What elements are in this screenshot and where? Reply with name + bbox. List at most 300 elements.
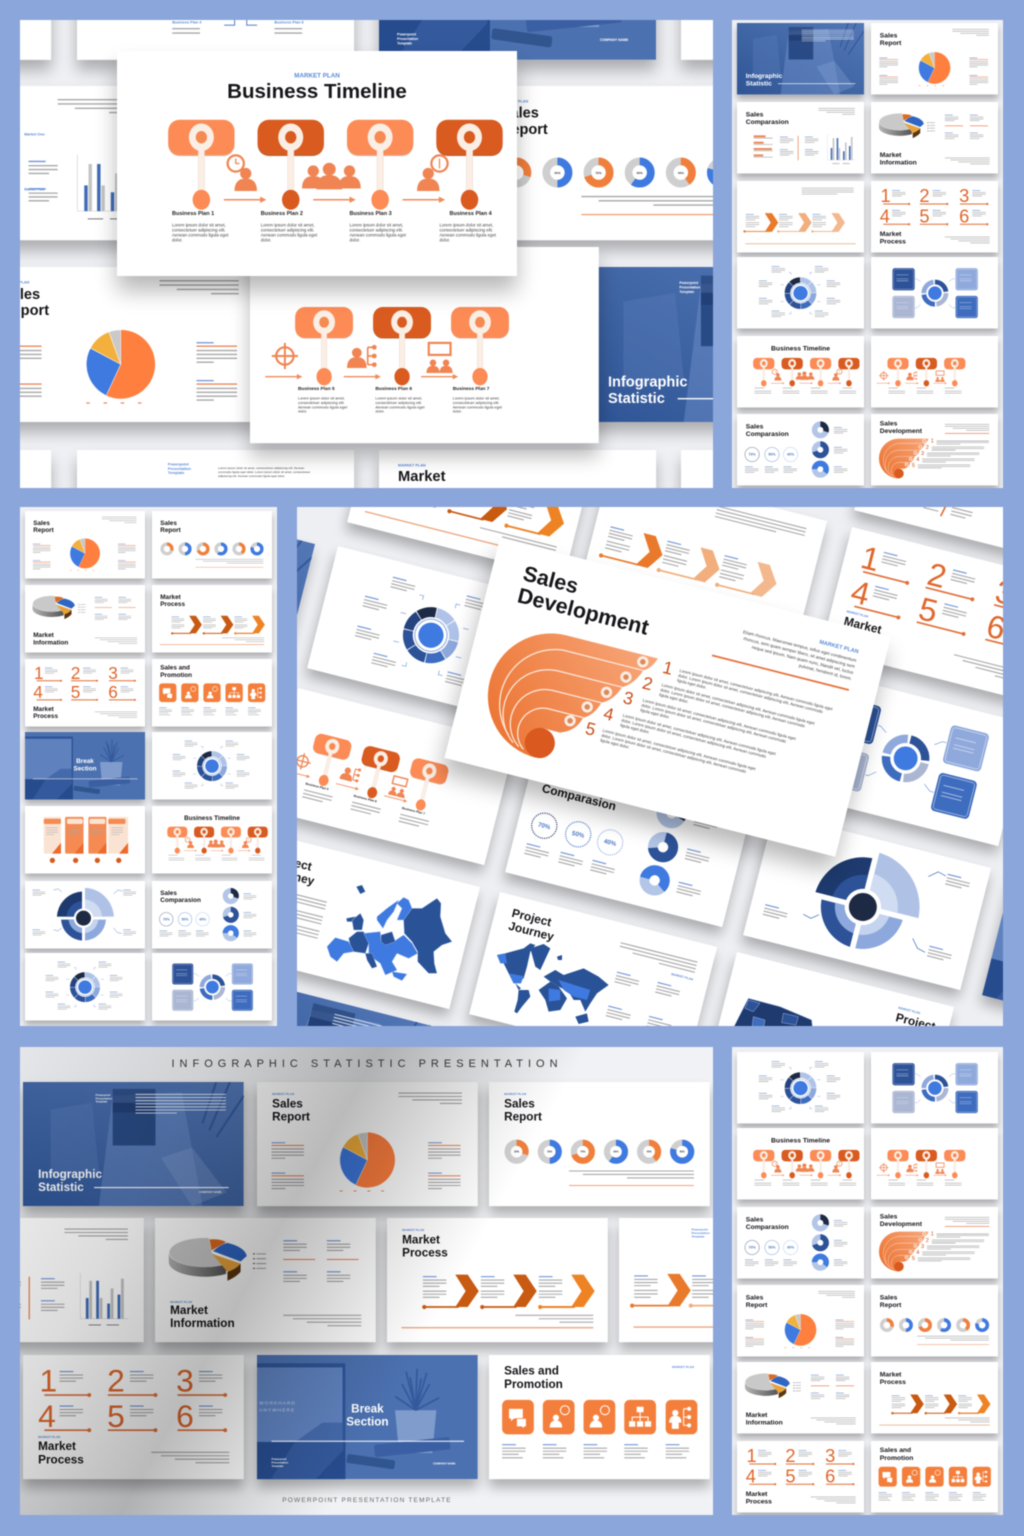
thumb: sales and promotion: Sales and xyxy=(160,665,190,672)
thumb: market information: Market xyxy=(33,632,55,639)
slide: wheel diagram xyxy=(305,546,555,731)
slide: project journey: MARKET PLAN xyxy=(671,972,694,982)
slide: market process numbers: Market xyxy=(842,614,883,637)
slide: bottom row market xyxy=(370,450,664,488)
thumb: market process numbers xyxy=(737,1441,864,1517)
thumb: sales comparison circles: Comparasion xyxy=(746,1224,789,1231)
text: numbered items: dolor. Lorem ipsum dolor sit amet, consectetuer adipiscing elit. Aenean commodo xyxy=(641,702,787,744)
thumb: chevrons xyxy=(737,181,864,257)
slide: sales report donuts: 70% xyxy=(595,171,602,175)
thumb: sales development: 4 xyxy=(916,1250,919,1256)
heading: sales development: Sales xyxy=(521,562,581,599)
text: plan labels: consectetuer adipiscing elit. xyxy=(375,401,422,405)
thumb: business timeline: Business Timeline xyxy=(771,346,830,353)
slide: bottom row market: MARKET PLAN xyxy=(398,463,426,467)
text: numbered items: ligula eget dolor. xyxy=(600,737,630,750)
slide: sales report donuts: Sales xyxy=(501,106,539,122)
thumb: sales development: 3 xyxy=(921,1244,924,1250)
slide: market information: Information xyxy=(170,1317,235,1330)
text: plan labels xyxy=(172,211,497,243)
slide: usa: MARKET PLAN xyxy=(898,1006,921,1015)
slide: market process numbers: 6 xyxy=(983,608,1009,647)
slide: europe xyxy=(230,832,480,1017)
slide: chevrons continued xyxy=(619,1218,840,1350)
thumb: wheel diagram xyxy=(737,1052,864,1128)
slide: break section: Break xyxy=(351,1402,384,1415)
slide: infographic statistic: Infographic xyxy=(38,1168,102,1181)
slide: market process chevrons xyxy=(345,400,595,585)
slide: project journey: Journey xyxy=(507,919,556,944)
slide: infographic statistic xyxy=(23,1082,244,1214)
panel: rotated sales development showcase xyxy=(65,388,1024,1159)
thumb: market process numbers: Market xyxy=(746,1491,768,1498)
slide: sales comparison: 50% xyxy=(571,830,585,840)
text: plan labels: Lorem ipsum dolor sit amet, xyxy=(298,397,345,401)
slide: blue cover left xyxy=(65,489,315,674)
thumb: market process numbers: 1 xyxy=(881,185,891,206)
thumb: sales comparison circles: 40% xyxy=(787,453,795,457)
slide: break section: Section xyxy=(346,1415,389,1428)
thumb: market information xyxy=(737,1362,864,1438)
slide: infographic statistic: Powerpoint xyxy=(95,1093,111,1097)
slide: sales report donuts xyxy=(489,1082,710,1214)
text: plan labels: Lorem ipsum dolor sit amet, xyxy=(375,397,422,401)
heading: sales development xyxy=(515,562,657,640)
thumb: sales development: 2 xyxy=(926,1238,929,1244)
slide: break section: Presentation xyxy=(271,1460,288,1464)
slide: bottom row powerpoint template: Lorem ipsum dolor sit amet, consectetuer adipiscing elit. Aenean xyxy=(218,466,305,470)
slide: market process numbers: 2 xyxy=(924,556,950,595)
slide: sales and promotion: Promotion xyxy=(504,1378,563,1391)
slide: sales report pie: MARKET PLAN xyxy=(2,280,30,284)
thumb: market information xyxy=(25,585,145,657)
text: plan labels: Lorem ipsum dolor sit amet, xyxy=(440,223,493,228)
text: market plan and intro: rhoncus, sem quam semper libero, sit amet adipiscing sem xyxy=(743,636,856,669)
slide: blue cover right xyxy=(980,873,1024,1058)
slide: hub diagram xyxy=(779,669,1024,854)
text: plan labels: Business Plan 4 xyxy=(450,211,493,217)
thumb: market process numbers: 5 xyxy=(785,1465,796,1486)
thumb: sales comparison bars: Comparasion xyxy=(746,119,789,126)
thumb: sales report pie xyxy=(25,511,145,583)
text: numbered items: dolor. Lorem ipsum dolor sit amet, consectetuer adipiscing elit. Aenean commodo xyxy=(601,733,747,774)
thumb: market process numbers: 1 xyxy=(747,1445,757,1466)
slide: market process chevrons: MARKET PLAN xyxy=(402,1228,424,1232)
slide: sales report donuts: 60% xyxy=(637,171,643,175)
text: market plan and intro: pulvinar, hendrerit id, lorem. xyxy=(798,663,852,681)
thumb: sales and promotion: Promotion xyxy=(160,672,192,679)
text: numbered items: 2 xyxy=(640,673,655,694)
thumb: business timeline xyxy=(152,806,272,878)
map: world xyxy=(497,943,609,1024)
slide: top row business plans xyxy=(68,20,362,79)
heading: market plan: MARKET PLAN xyxy=(294,72,340,79)
slide: europe: Journey xyxy=(268,863,316,888)
slide: top row break section: Powerpoint xyxy=(397,33,417,37)
slide: market process numbers: 4 xyxy=(38,1398,56,1434)
panel: thumbnails top right xyxy=(732,20,1003,490)
thumb: market process numbers: 6 xyxy=(108,682,118,702)
text: numbered items: ligula eget dolor. xyxy=(659,692,689,704)
slide: chevrons continued: Powerpoint xyxy=(691,1227,708,1231)
thumb: hub diagram xyxy=(871,257,998,333)
thumb: market information: Information xyxy=(33,639,68,646)
text: plan labels: dolor. xyxy=(440,238,450,243)
text: plan labels: dolor. xyxy=(261,238,271,243)
thumb: hub diagram xyxy=(152,953,272,1025)
text: plan labels: Aenean commodo ligula eget xyxy=(453,405,503,409)
heading: business timeline: Business Timeline xyxy=(227,80,407,103)
thumb: wheel diagram xyxy=(25,953,145,1025)
thumb: wheel diagram xyxy=(152,732,272,804)
slide: market process numbers: 5 xyxy=(915,590,941,630)
slide: sales comparison bars xyxy=(20,86,118,259)
text: numbered items: dolor. Lorem ipsum dolor sit amet, consectetuer adipiscing elit. Aenean commodo xyxy=(660,687,806,729)
text: plan labels: consectetuer adipiscing elit. xyxy=(261,228,314,233)
slide: top row break section: Presentation xyxy=(397,37,418,41)
metallic sheen overlay xyxy=(20,1047,713,1515)
thumb: business timeline xyxy=(737,336,864,412)
thumb: sales report pie: Report xyxy=(880,40,902,47)
slide: sales report pie xyxy=(0,267,259,432)
text: numbered items: Lorem ipsum dolor sit amet, consectetuer adipiscing elit. Aenean commodo ligula eget xyxy=(661,682,816,726)
text: numbered items: dolor. Lorem ipsum dolor sit amet, consectetuer adipiscing elit. Aenean commodo xyxy=(678,673,824,714)
thumb: business plans three xyxy=(871,336,998,412)
thumb: market process chevrons: Process xyxy=(880,1379,906,1386)
thumb: break section: Break xyxy=(76,758,94,765)
thumb: sales comparison circles: Comparasion xyxy=(160,897,201,904)
slide: market process numbers: MARKET PLAN xyxy=(846,609,870,619)
slide: bottom row powerpoint template xyxy=(68,450,362,488)
text: plan labels: consectetuer adipiscing elit. xyxy=(172,228,226,233)
slide: sales report donuts: 40% xyxy=(678,171,684,175)
thumb: market process numbers xyxy=(25,659,145,731)
thumb: sales report pie: Sales xyxy=(33,520,50,527)
slide: upper right xyxy=(852,388,1024,573)
text: plan labels: Lorem ipsum dolor sit amet, xyxy=(261,223,315,228)
map: usa xyxy=(734,998,813,1030)
text: market plan and intro: MARKET PLAN xyxy=(819,640,859,655)
slide: infographic statistic: Template xyxy=(95,1100,108,1104)
slide: business plans three: Business Plan 5 xyxy=(305,782,329,791)
slide: sales comparison xyxy=(503,750,753,935)
thumb: sales comparison circles xyxy=(152,881,272,953)
slide: sales report donuts: 40% xyxy=(647,1151,652,1154)
thumb: orange cards xyxy=(25,806,145,878)
slide: bar chart xyxy=(0,1218,144,1350)
slide: break section: Powerpoint xyxy=(271,1457,287,1461)
thumb: market process numbers: Market xyxy=(880,231,902,238)
slide: break section: ANYWHERE xyxy=(259,1408,295,1414)
thumb: sales development: Sales xyxy=(880,1214,898,1221)
text: plan labels: Aenean commodo ligula eget xyxy=(440,233,497,238)
thumb: sales comparison circles: 50% xyxy=(182,917,188,921)
thumb: sales report pie: Sales xyxy=(880,33,898,40)
slide: infographic statistic cover: Infographic xyxy=(608,375,688,391)
slide: chevrons top xyxy=(577,466,827,651)
text: plan labels: Lorem ipsum dolor sit amet, xyxy=(453,397,500,401)
thumb: market process numbers: 2 xyxy=(919,185,930,206)
text: numbered items: 1 xyxy=(661,657,675,679)
slide: top row break section: Template xyxy=(397,41,412,45)
thumb: sales comparison circles: 50% xyxy=(768,453,776,457)
text: plan labels: Business Plan 5 xyxy=(298,386,335,392)
thumb: sales and promotion xyxy=(152,659,272,731)
slide: market process numbers: 3 xyxy=(992,573,1018,612)
slide: market process numbers: 2 xyxy=(107,1363,125,1399)
thumb: sales development xyxy=(871,414,998,490)
slide: business plans three: Business Plan 7 xyxy=(401,806,426,816)
text: plan labels: dolor. xyxy=(172,238,183,243)
slide: sales report pie: MARKET PLAN xyxy=(272,1092,294,1096)
text: market plan and intro: Etiam rhoncus. Maecenas tempus, tellus eget condimentum xyxy=(742,629,857,663)
thumb: sales comparison bars: Sales xyxy=(746,112,764,119)
text: numbered items xyxy=(583,642,836,796)
thumb: sales comparison circles: 70% xyxy=(749,1246,756,1250)
slide: infographic statistic cover: Presentation xyxy=(679,286,700,290)
thumb: sales and promotion: Sales and xyxy=(880,1447,911,1454)
thumb: quarter diagram xyxy=(25,881,145,953)
text: plan labels: Business Plan 2 xyxy=(261,211,303,217)
text: numbered items: ligula eget dolor. xyxy=(677,678,707,690)
slide: business plans three xyxy=(265,688,515,873)
text: numbered items: 3 xyxy=(621,687,636,709)
text: numbered items: 4 xyxy=(601,703,616,725)
thumb: sales report donuts: Sales xyxy=(880,1295,898,1302)
thumb: sales comparison bars xyxy=(737,102,864,178)
slide: market process numbers: Process xyxy=(38,1453,84,1466)
slide: project journey: Project xyxy=(510,906,553,929)
slide: infographic statistic: Statistic xyxy=(38,1181,84,1194)
text: plan labels: Business Plan 3 xyxy=(350,211,392,217)
slide: blue cover bottom left xyxy=(194,974,444,1159)
slide: top row business plans: Business Plan 4 xyxy=(172,21,202,25)
slide: infographic statistic cover: Statistic xyxy=(608,391,665,407)
slide: sales report pie: Report xyxy=(272,1111,310,1124)
thumb: market process numbers: 2 xyxy=(71,663,80,683)
slide: market process numbers: 4 xyxy=(847,573,874,613)
thumb: market process numbers: Process xyxy=(33,713,58,720)
slide: bottom row powerpoint template: Presentation xyxy=(168,467,192,471)
thumb: sales comparison circles: 70% xyxy=(749,453,756,457)
heading: infographic statistic presentation: INFOGRAPHIC STATISTIC PRESENTATION xyxy=(171,1058,563,1070)
thumb: sales comparison circles xyxy=(737,1207,864,1283)
slide: sales report pie: Sales xyxy=(2,287,40,303)
slide: sales report donuts: Report xyxy=(501,122,548,138)
thumb: market process numbers: 3 xyxy=(825,1445,835,1466)
slide: project journey xyxy=(467,892,717,1077)
thumb: sales comparison circles xyxy=(737,414,864,490)
text: market plan and intro: neque sed ipsum. Nam quam nunc, blandit vel, luctus xyxy=(751,645,855,675)
text: market plan and intro xyxy=(738,621,860,681)
slide: break section: COMPANY NAME xyxy=(433,1462,456,1466)
thumb: market information: Information xyxy=(746,1420,783,1427)
slide: market process numbers: 1 xyxy=(40,1363,57,1399)
thumb: market process numbers: 4 xyxy=(880,205,890,226)
slide: market process numbers xyxy=(23,1355,244,1487)
slide: infographic statistic cover xyxy=(598,266,714,441)
slide: market process numbers: 1 xyxy=(857,539,884,578)
slide: business timeline main xyxy=(117,51,517,291)
slide: sales comparison bars: Market Two xyxy=(24,188,45,192)
slide: sales report donuts: 50% xyxy=(554,171,561,175)
thumb: market process numbers: 4 xyxy=(33,682,43,702)
thumb: market information: Market xyxy=(746,1412,768,1419)
slide: infographic statistic: COMPANY NAME xyxy=(199,1190,222,1194)
slide: market information: Market xyxy=(170,1304,208,1317)
slide: sales and promotion xyxy=(489,1355,710,1487)
thumb: market information xyxy=(871,102,998,178)
slide: market process numbers: MARKET PLAN xyxy=(38,1435,60,1439)
text: plan labels: consectetuer adipiscing elit. xyxy=(440,228,493,233)
slide: infographic statistic: Presentation xyxy=(95,1096,112,1100)
thumb: sales report pie: Sales xyxy=(746,1295,764,1302)
text: numbered items: 5 xyxy=(583,718,598,740)
slide: market information xyxy=(155,1218,376,1350)
thumb: sales comparison circles: 50% xyxy=(768,1246,776,1250)
text: numbered items: ligula eget dolor. xyxy=(620,722,650,735)
slide: usa: Project xyxy=(894,1010,937,1034)
slide: top row break section: COMPANY NAME xyxy=(600,38,629,42)
thumb: sales report donuts: Report xyxy=(880,1302,902,1309)
thumb: hub diagram xyxy=(871,1052,998,1128)
slide: infographic statistic cover: Template xyxy=(679,290,694,294)
thumb: market process numbers: 6 xyxy=(825,1465,835,1486)
slide: sales report donuts xyxy=(516,86,714,259)
slide: sales report donuts: MARKET PLAN xyxy=(501,99,529,103)
slide: sales and promotion: Sales and xyxy=(504,1364,559,1377)
thumb: sales and promotion xyxy=(871,1441,998,1517)
thumb: sales development xyxy=(871,1207,998,1283)
thumb: business plans three xyxy=(871,1128,998,1204)
thumb: sales comparison circles: 70% xyxy=(163,917,170,921)
slide: market process numbers: Market xyxy=(38,1440,76,1453)
thumb: sales development: Development xyxy=(880,1221,923,1228)
slide: bottom row powerpoint template: commodo ligula eget dolor. Lorem ipsum dolor sit amet, consectetuer xyxy=(218,470,310,474)
text: plan labels: consectetuer adipiscing elit. xyxy=(453,401,499,405)
map: europe xyxy=(327,885,452,981)
slide: sales report donuts: 70% xyxy=(580,1151,586,1154)
slide: market process numbers: 5 xyxy=(107,1398,125,1434)
thumb: market process chevrons xyxy=(152,585,272,657)
slide: sales comparison: Comparasion xyxy=(541,781,618,813)
thumb: market process numbers xyxy=(871,181,998,257)
text: plan labels: Business Plan 7 xyxy=(453,386,490,392)
slide: europe: Project xyxy=(271,850,313,874)
thumb: break section xyxy=(25,732,145,804)
panel: presentation overview xyxy=(0,1047,840,1515)
slide: market information: MARKET PLAN xyxy=(170,1300,192,1304)
slide: market process numbers: 3 xyxy=(176,1363,194,1399)
slide: sales report donuts: MARKET PLAN xyxy=(504,1092,526,1096)
text: numbered items: Lorem ipsum dolor sit amet, consectetuer adipiscing elit. Aenean commodo ligula eget xyxy=(642,698,797,741)
panel: business timeline showcase xyxy=(19,19,714,489)
thumb: sales report pie: Report xyxy=(746,1302,768,1309)
thumb: market process numbers: Market xyxy=(33,706,55,713)
thumb: business timeline xyxy=(737,1128,864,1204)
panel: thumbnails left xyxy=(20,507,277,1026)
text: numbered items: Lorem ipsum dolor sit amet, consectetuer adipiscing elit. Aenean commodo ligula eget xyxy=(622,713,777,756)
thumb: sales report donuts xyxy=(152,511,272,583)
thumb: sales comparison circles: Sales xyxy=(746,1217,764,1224)
slide: sales development main xyxy=(441,538,891,871)
slide: sales report donuts: Sales xyxy=(504,1098,535,1111)
slide: business plans three: Business Plan 6 xyxy=(353,794,377,803)
slide: market process chevrons: Process xyxy=(402,1247,448,1260)
slide: chevrons continued: Presentation xyxy=(691,1231,710,1235)
thumb: market process chevrons xyxy=(871,1362,998,1438)
text: numbered items: dolor. Lorem ipsum dolor sit amet, consectetuer adipiscing elit. Aenean commodo xyxy=(621,718,767,759)
thumb: sales development: 1 xyxy=(931,1232,934,1238)
slide: business plans five to seven xyxy=(250,247,599,456)
thumb: sales comparison circles: 40% xyxy=(199,917,206,921)
thumb: market process chevrons: Process xyxy=(160,601,185,608)
slide: market process chevrons xyxy=(387,1218,608,1350)
text: plan labels: Aenean commodo ligula eget xyxy=(375,405,425,409)
slide: sales report donuts: 80% xyxy=(680,1151,685,1154)
text: plan labels: Aenean commodo ligula eget xyxy=(350,233,407,238)
slide: market process numbers xyxy=(819,527,1024,712)
thumb: sales development: 1 xyxy=(931,439,934,445)
slide: sales and promotion: MARKET PLAN xyxy=(672,1365,694,1369)
thumb: market process numbers: 4 xyxy=(746,1465,756,1486)
thumb: market process numbers: 3 xyxy=(108,663,118,683)
thumb: market process chevrons: Market xyxy=(880,1372,902,1379)
slide: bottom row powerpoint template: Template xyxy=(168,471,184,475)
thumb: market process numbers: 1 xyxy=(34,663,44,683)
panel: thumbnails bottom right xyxy=(732,1047,1003,1517)
slide: sales comparison: 70% xyxy=(537,821,551,831)
thumb: sales development: 5 xyxy=(912,463,915,469)
text: plan labels: Aenean commodo ligula eget xyxy=(261,233,318,238)
slide: bottom row powerpoint template: Powerpoint xyxy=(168,463,189,467)
thumb: sales report pie: Report xyxy=(33,527,55,534)
slide: break section xyxy=(257,1355,478,1487)
heading: sales development: Development xyxy=(515,583,651,640)
thumb: infographic statistic: Statistic xyxy=(746,81,772,88)
footer: powerpoint presentation template: POWERPOINT PRESENTATION TEMPLATE xyxy=(282,1497,452,1504)
slide: sales report pie: Report xyxy=(2,303,49,319)
thumb: market process numbers: 6 xyxy=(959,205,969,226)
text: plan labels xyxy=(298,386,503,414)
thumb: market process numbers: 5 xyxy=(71,682,80,702)
slide: infographic statistic cover: Powerpoint xyxy=(679,281,699,285)
slide: top row business plans: Business Plan 6 xyxy=(274,21,304,25)
slide: quarter diagram xyxy=(741,813,991,998)
thumb: sales comparison circles: Sales xyxy=(160,890,177,897)
thumb: market process numbers: Process xyxy=(880,238,906,245)
text: numbered items: Lorem ipsum dolor sit amet, consectetuer adipiscing elit. Aenean commodo ligula eget xyxy=(602,728,757,771)
thumb: sales report donuts: Sales xyxy=(160,520,177,527)
slide: sales report pie: Sales xyxy=(272,1098,303,1111)
text: plan labels: Aenean commodo ligula eget xyxy=(172,233,229,238)
text: plan labels: dolor. xyxy=(375,410,385,414)
slide: bottom row market: Market xyxy=(398,469,446,485)
slide: market process numbers: 6 xyxy=(176,1398,194,1434)
thumb: market process numbers: 2 xyxy=(785,1445,796,1466)
thumb: market process numbers: 5 xyxy=(919,205,930,226)
slide: break section: Template xyxy=(271,1464,284,1468)
text: plan labels: Business Plan 6 xyxy=(375,386,412,392)
slide: sales report pie xyxy=(257,1082,478,1214)
thumb: market information: Market xyxy=(880,152,902,159)
slide: sales report donuts: 50% xyxy=(547,1151,553,1154)
slide: break section: WORKHARD xyxy=(259,1401,296,1407)
thumb: sales comparison circles: Comparasion xyxy=(746,431,789,438)
thumb: sales report donuts xyxy=(871,1285,998,1361)
text: plan labels: Lorem ipsum dolor sit amet, xyxy=(172,223,226,228)
thumb: wheel diagram xyxy=(737,257,864,333)
